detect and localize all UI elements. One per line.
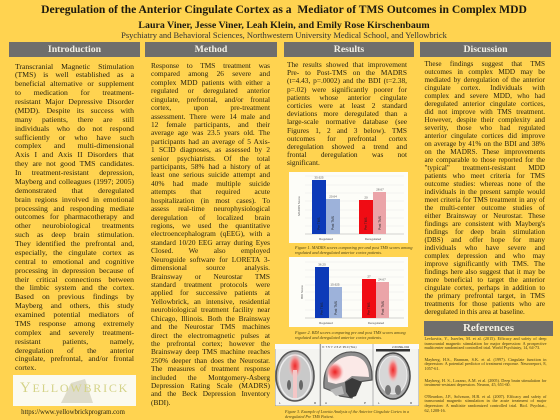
text block: introduction: other neurobiological treatments [15,221,134,230]
references list: transcranial magnetic stimulation in the acute treatment of major [424,398,546,403]
text block: introduction: sufficiently or who have such [15,132,134,142]
text block: method: electroencephalogram (qEEG), with a [151,229,270,238]
caption: figure 3: Figure 3. Example of Loretta Analysis of the Anterior Cingulate Cortex in a [285,408,409,414]
caption: figure 2: regulated and deregulated anterior cortex patients. [295,335,382,340]
caption: figure 2: Figure 2. BDI scores comparing pre and post TMS scores among [295,330,406,335]
text block: method: average age was 23.5 years old. The [151,128,270,137]
text block: introduction: TMS response among extremely [15,319,134,328]
text block: introduction: In treatment-resistant depression, [15,168,134,177]
text block: introduction: demonstrated that deregulated [15,186,134,195]
text block: method: standard treatment protocols were [151,280,270,289]
brain: coronal slice [376,349,410,399]
text block: results: significant. [287,158,320,167]
text block: discussion: on the MADRS. These improvements [424,148,545,156]
bar chart: figure 2 BDI: 36.25 [318,262,326,266]
text block: discussion: These findings suggest that TMS [424,60,545,68]
text block: discussion: are comparable to those reported for the [424,156,545,164]
references list: Mayberg, H.S., Brannan, S.K. et al. (1997). Cingulate function in [424,357,546,362]
bar chart: figure 1 MADRS: Regulated [319,237,333,241]
text block: discussion: "typical" treatment-resistant MDD [424,164,545,172]
text block: method: included the Montgomery-Asberg [151,373,270,382]
text block: introduction: cortex. [15,363,36,372]
figure 3: LORETA brain scans: R [410,401,413,405]
bar chart: figure 2 BDI: Post TMS [381,301,385,315]
text block: discussion: (DBS) and offer hope for many [424,236,545,244]
bar chart: figure 1 MADRS: 35.625 [314,176,324,180]
text block: introduction: complex and severely treatment- [15,328,134,337]
bar chart: figure 2 BDI: 24.67 [378,278,386,282]
text block: results: large-scale normative database (see [287,117,407,126]
text block: method: neurobiological treatment facility near [151,305,270,314]
text block: introduction: central to emotional and cognitive [15,257,134,266]
text block: discussion: anterior cingulate cortices did improve [424,132,545,140]
text block: introduction: They identified the prefrontal and, [15,239,134,248]
heading: Introduction [9,42,140,57]
title: Deregulation of the Anterior Cingulate Cortex as a Mediator of TMS Outcomes in Complex MDD [41,3,527,16]
text block: method: applied for successive patients at [151,288,270,297]
bar chart: figure 1 MADRS: 20.64 [329,194,337,198]
figure 3: LORETA brain scans: 2.6039E-002 [392,345,410,349]
text block: discussion: complex and severe MDD, who had [424,92,545,100]
text block: method: 40% had made multiple suicide [151,179,270,188]
figure 3: LORETA brain scans: A [325,401,327,405]
text block: discussion: the multi-center outcome studies of [424,204,545,212]
text block: discussion: improve significantly with TMS. The [424,260,545,268]
text block: results: corticies were at least 2 standard [287,101,407,110]
text block: method: Closed. We also employed [151,246,270,255]
bar chart: figure 2 BDI: BDI Score [300,285,304,299]
text block: introduction: many patients, there are still [15,115,134,124]
text block: discussion: individuals who have severe and [424,244,545,252]
text block: introduction: Mayberg and others, this study [15,301,134,310]
text block: discussion: deregulated anterior cingulate cortices, [424,100,545,108]
text block: introduction: Axis I and Axis II Disorders that [15,150,134,159]
heading: Discussion: Discussion [463,44,508,55]
heading: References [424,320,553,336]
text block: discussion: outcomes in complex MDD may be [424,68,545,76]
text block: introduction: individuals who do not respond [15,124,134,133]
bar chart: figure 1 MADRS [289,172,408,243]
heading: Introduction: Introduction [48,44,101,55]
text block: discussion [424,60,545,316]
figure 3: LORETA brain scans: X: 7.5 Y: 2.5 Z: 35.0 (TAL) [322,345,357,349]
text block: method: regulated or deregulated anterior [151,86,270,95]
text block: discussion: findings here also suggest that it may be [424,268,545,276]
text block: introduction: especially, the cingulate cortex as [15,248,134,257]
text block: method: Neuroguide software for LORETA 3- [151,255,270,264]
references list: O'Reardon, J.P., Solvason, H.B. et al. (2007). Efficacy and safety of [424,394,546,399]
references list: treatment-resistant depression. Neuron, 45, 651-60. [424,382,511,387]
text block: method: standard 10/20 EEG array during Eyes [151,238,270,247]
text block: method: cingulate, prefrontal, and/or frontal [151,95,270,104]
text block: results: patients whose anterior cingulate [287,93,407,102]
text block: introduction: complex and multi-dimensional [15,141,134,150]
text block: method [151,61,270,407]
text block: discussion: severity, those who had regulated [424,124,545,132]
text block: discussion: more beneficial to target the anterior [424,276,545,284]
text block: discussion: the primary prefrontal target, in TMS [424,292,545,300]
references list: depression: A multisite randomized controlled trial. Biol. Psychiat., [424,403,546,408]
text block: discussion: findings are consistent with Mayberg's [424,220,545,228]
caption: figure 3: deregulated Pre TMS Patient. [285,414,334,419]
references list: transcranial magnetic stimulation for major depression: A prospective [424,341,546,346]
text block: method: participants had an average of 5 Axis- [151,137,270,146]
text block: discussion: However, despite their complexity and [424,116,545,124]
text block: introduction: such as deep brain stimulation. [15,230,134,239]
text block: introduction: Transcranial Magnetic Stimulation [15,62,134,70]
caption: figure 1 [295,245,413,255]
bar chart: figure 1 MADRS: Deregulated [365,237,381,241]
text block: method: Brainsway or Neurostar TMS [151,272,270,281]
bar chart: figure 2 BDI: 15.625 [330,282,340,286]
heading: Results [284,42,414,57]
text block: method: Depression Rating Scale (MADRS) [151,381,270,390]
caption: figure 1: Figure 1. MADRS scores comparing pre and post TMS scores among [295,245,413,250]
text block: method: Chicago, Illinois. Both the Brainsway [151,314,270,323]
text block: discussion: deregulated in this area at baseline. [424,308,525,316]
affiliation: Psychiatry and Behavioral Sciences, Northwestern University Medical School, and Yellowbrick [121,30,447,40]
text block: introduction [15,62,134,372]
text block: introduction: brain regions involved in emotional [15,195,134,204]
text block: results: frontal deregulation was not [287,150,407,159]
text block: results: p=.02) were significantly poorer for [287,85,407,94]
text block: introduction: processing in depression because of [15,266,134,275]
text block: introduction: processing and responding mediate [15,204,134,212]
text block: method: 250% deeper than does the Neurostar. [151,356,270,365]
text block: discussion: individuals in the present sample would [424,188,545,196]
text block: method: and the Beck Depression Inventory [151,389,270,398]
bar chart: figure 1 MADRS: 28.67 [376,188,384,192]
figure 3: LORETA brain scans [275,344,419,406]
text block: introduction: they are not good TMS candidates. [15,159,134,168]
bar chart: figure 1 MADRS: Pre TMS [317,217,321,230]
text block: introduction: resistant patients, namely, [15,337,134,346]
text block: introduction: their critical connections between [15,274,134,284]
text block: method: participants, 58% had a history of at [151,162,270,171]
references list: multicenter randomized controlled trial. World Psychiatry, 14, 64-73. [424,345,540,350]
bar chart: figure 1 MADRS: MADRS Score [297,196,301,216]
text block: method: regions, we used the quantitative [151,221,270,230]
text block: method: and the Neurostar TMS machines [151,322,270,331]
text block: discussion: outcome studies: whereas none of the [424,180,545,188]
text block: method: complex MDD patients with either a [151,78,270,87]
caption: figure 2 [295,330,406,340]
bar chart: figure 1 MADRS: 20 [364,196,368,200]
heading: Method [145,42,277,57]
text block: introduction: Mayberg and colleagues (1997; 2005) [15,177,134,186]
text block: results: The results showed that improvement [287,60,407,69]
text block: method: hospitalization (in most cases). To [151,196,270,205]
brain: axial slice [276,351,314,401]
text block: results: Pre- to Post-TMS on the MADRS [287,68,407,77]
text block: results: Figures 1, 2 and 3 below). TMS [287,126,407,134]
text block: results: outcomes for prefrontal cortex [287,134,407,143]
text block: discussion: mediated by deregulation of the anterior [424,76,545,84]
text block: introduction: outcomes for pharmacotherapy and [15,212,134,221]
icon: logo building silhouette [61,379,93,403]
references list: Mayberg, H. S., Lozano, A.M. et al. (2005). Deep brain stimulation for [424,378,546,383]
text block: method: 12 female participants, and their [151,120,270,129]
text block: introduction: beneficial alternative or supplement [15,79,134,88]
text block: method: (BDI). [151,398,170,407]
figure 3: LORETA brain scans: P [364,401,366,405]
figure 3: LORETA brain scans: L [378,401,380,405]
text block: introduction: examined potential mediators of [15,310,134,319]
heading: References: References [463,322,514,334]
bar chart: figure 2 BDI: Deregulated [368,321,384,325]
text block: discussion: treatments for those patients who are [424,300,545,308]
text block: method: attempts that required acute [151,187,270,196]
text block: method: Response to TMS treatment was [151,61,270,70]
bar chart: figure 2 BDI [289,257,408,327]
text block: introduction: cingulate, prefrontal, and/or frontal [15,354,134,363]
text block: method: assess real-time neurophysiological [151,204,270,213]
text block: discussion: on average by 41% on the BDI and 38% [424,140,545,148]
text block: introduction: the limbic system and the cortex. [15,283,134,292]
text block: discussion: did not improve with TMS treatment. [424,108,545,116]
text block: method: deregulation of localized brain [151,213,270,222]
references list: Levkovitz, Y., Isserles, M. et al. (2015). Efficacy and safety of deep [424,336,546,341]
text block: method: direct the electromagnetic pulses at [151,330,270,340]
figure 3: LORETA brain scans: L [279,401,281,405]
text block: discussion: findings for deep brain stimulation [424,228,545,236]
references list: 1057-61. [424,366,440,371]
brain: sagittal slice [324,352,372,398]
text block: results: (t=4.43, p=.0002) and the BDI (t=2.38, [287,76,407,85]
bar chart: figure 2 BDI: Pre TMS [320,302,324,315]
text block: discussion: cingulate cortex, perhaps in addition to [424,284,545,292]
bar chart: figure 1 MADRS: Post TMS [331,216,335,230]
text block: discussion: either Brainsway or Neurostar. These [424,212,545,220]
text block: method: Brainsway deep TMS machine reaches [151,347,270,356]
caption: figure 3 [285,408,409,419]
text block: method: compared among 26 severe and [151,69,270,78]
authors: Laura Viner, Jesse Viner, Leah Klein, and Emily Rose Kirschenbaum [138,20,430,31]
text block: method: dimensional source analysis. [151,263,270,272]
text block: method: 1 SCID diagnoses, as assessed by 2 [151,145,270,154]
logo: Yellowbrick [13,375,136,406]
text block: discussion: cingulate cortex. Individuals with [424,84,545,92]
logo wordmark: YELLOWBRICK [20,380,129,396]
text block: introduction: resistant Major Depressive Disorder [15,97,134,106]
text block: introduction: Based on previous findings by [15,292,134,301]
text block: discussion: complex depression and who may [424,252,545,260]
text block: introduction: (TMS) is well established as a [15,70,134,79]
text block: introduction: to medication for treatment- [15,88,134,97]
text block: results: deregulation showed a trend and [287,142,407,151]
bar chart: figure 2 BDI: 27 [367,274,371,278]
text block: method: The measures of treatment response [151,364,270,373]
bar chart: figure 2 BDI: Regulated [319,321,333,325]
text block: method: cortex, upon pre-treatment [151,103,270,112]
text block: method: senior psychiatrists. Of the total [151,154,270,163]
bar chart: figure 1 MADRS: Pre TMS [364,217,368,230]
caption: figure 1: regulated and deregulated anterior cortex patients. [295,250,382,255]
bar chart: figure 2 BDI: Pre TMS [367,302,371,315]
references list: depression: A potential predictor of treatment response. Neuroreport, 8, [424,361,546,366]
text block: discussion: patients who meet criteria for TMS [424,172,545,180]
text block: results: deviations more deregulated than a [287,109,407,118]
heading: Results: Results [334,44,364,55]
heading: Method: Method [195,44,227,55]
bar chart: figure 2 BDI: Post TMS [334,301,338,315]
text block: introduction: deregulation of the anterior [15,346,134,354]
text block: method: least one serious suicide attempt and [151,170,270,179]
text block: results [287,60,407,167]
text block: discussion: meet criteria for TMS treatment in any of [424,196,545,204]
text block: method: assessment. There were 14 male and [151,112,270,121]
references list: 62, 1208-16. [424,408,446,413]
figure 3: LORETA brain scans: R [314,401,317,405]
website url: https://www.yellowbrickprogram.com [21,408,125,416]
text block: method: the prefrontal cortex; however the [151,339,270,348]
bar chart: figure 1 MADRS: Post TMS [378,216,382,230]
heading: Discussion [420,42,551,57]
text block: introduction: (MDD). Despite its success with [15,106,134,115]
text block: method: Yellowbrick, an intensive, residential [151,297,270,306]
